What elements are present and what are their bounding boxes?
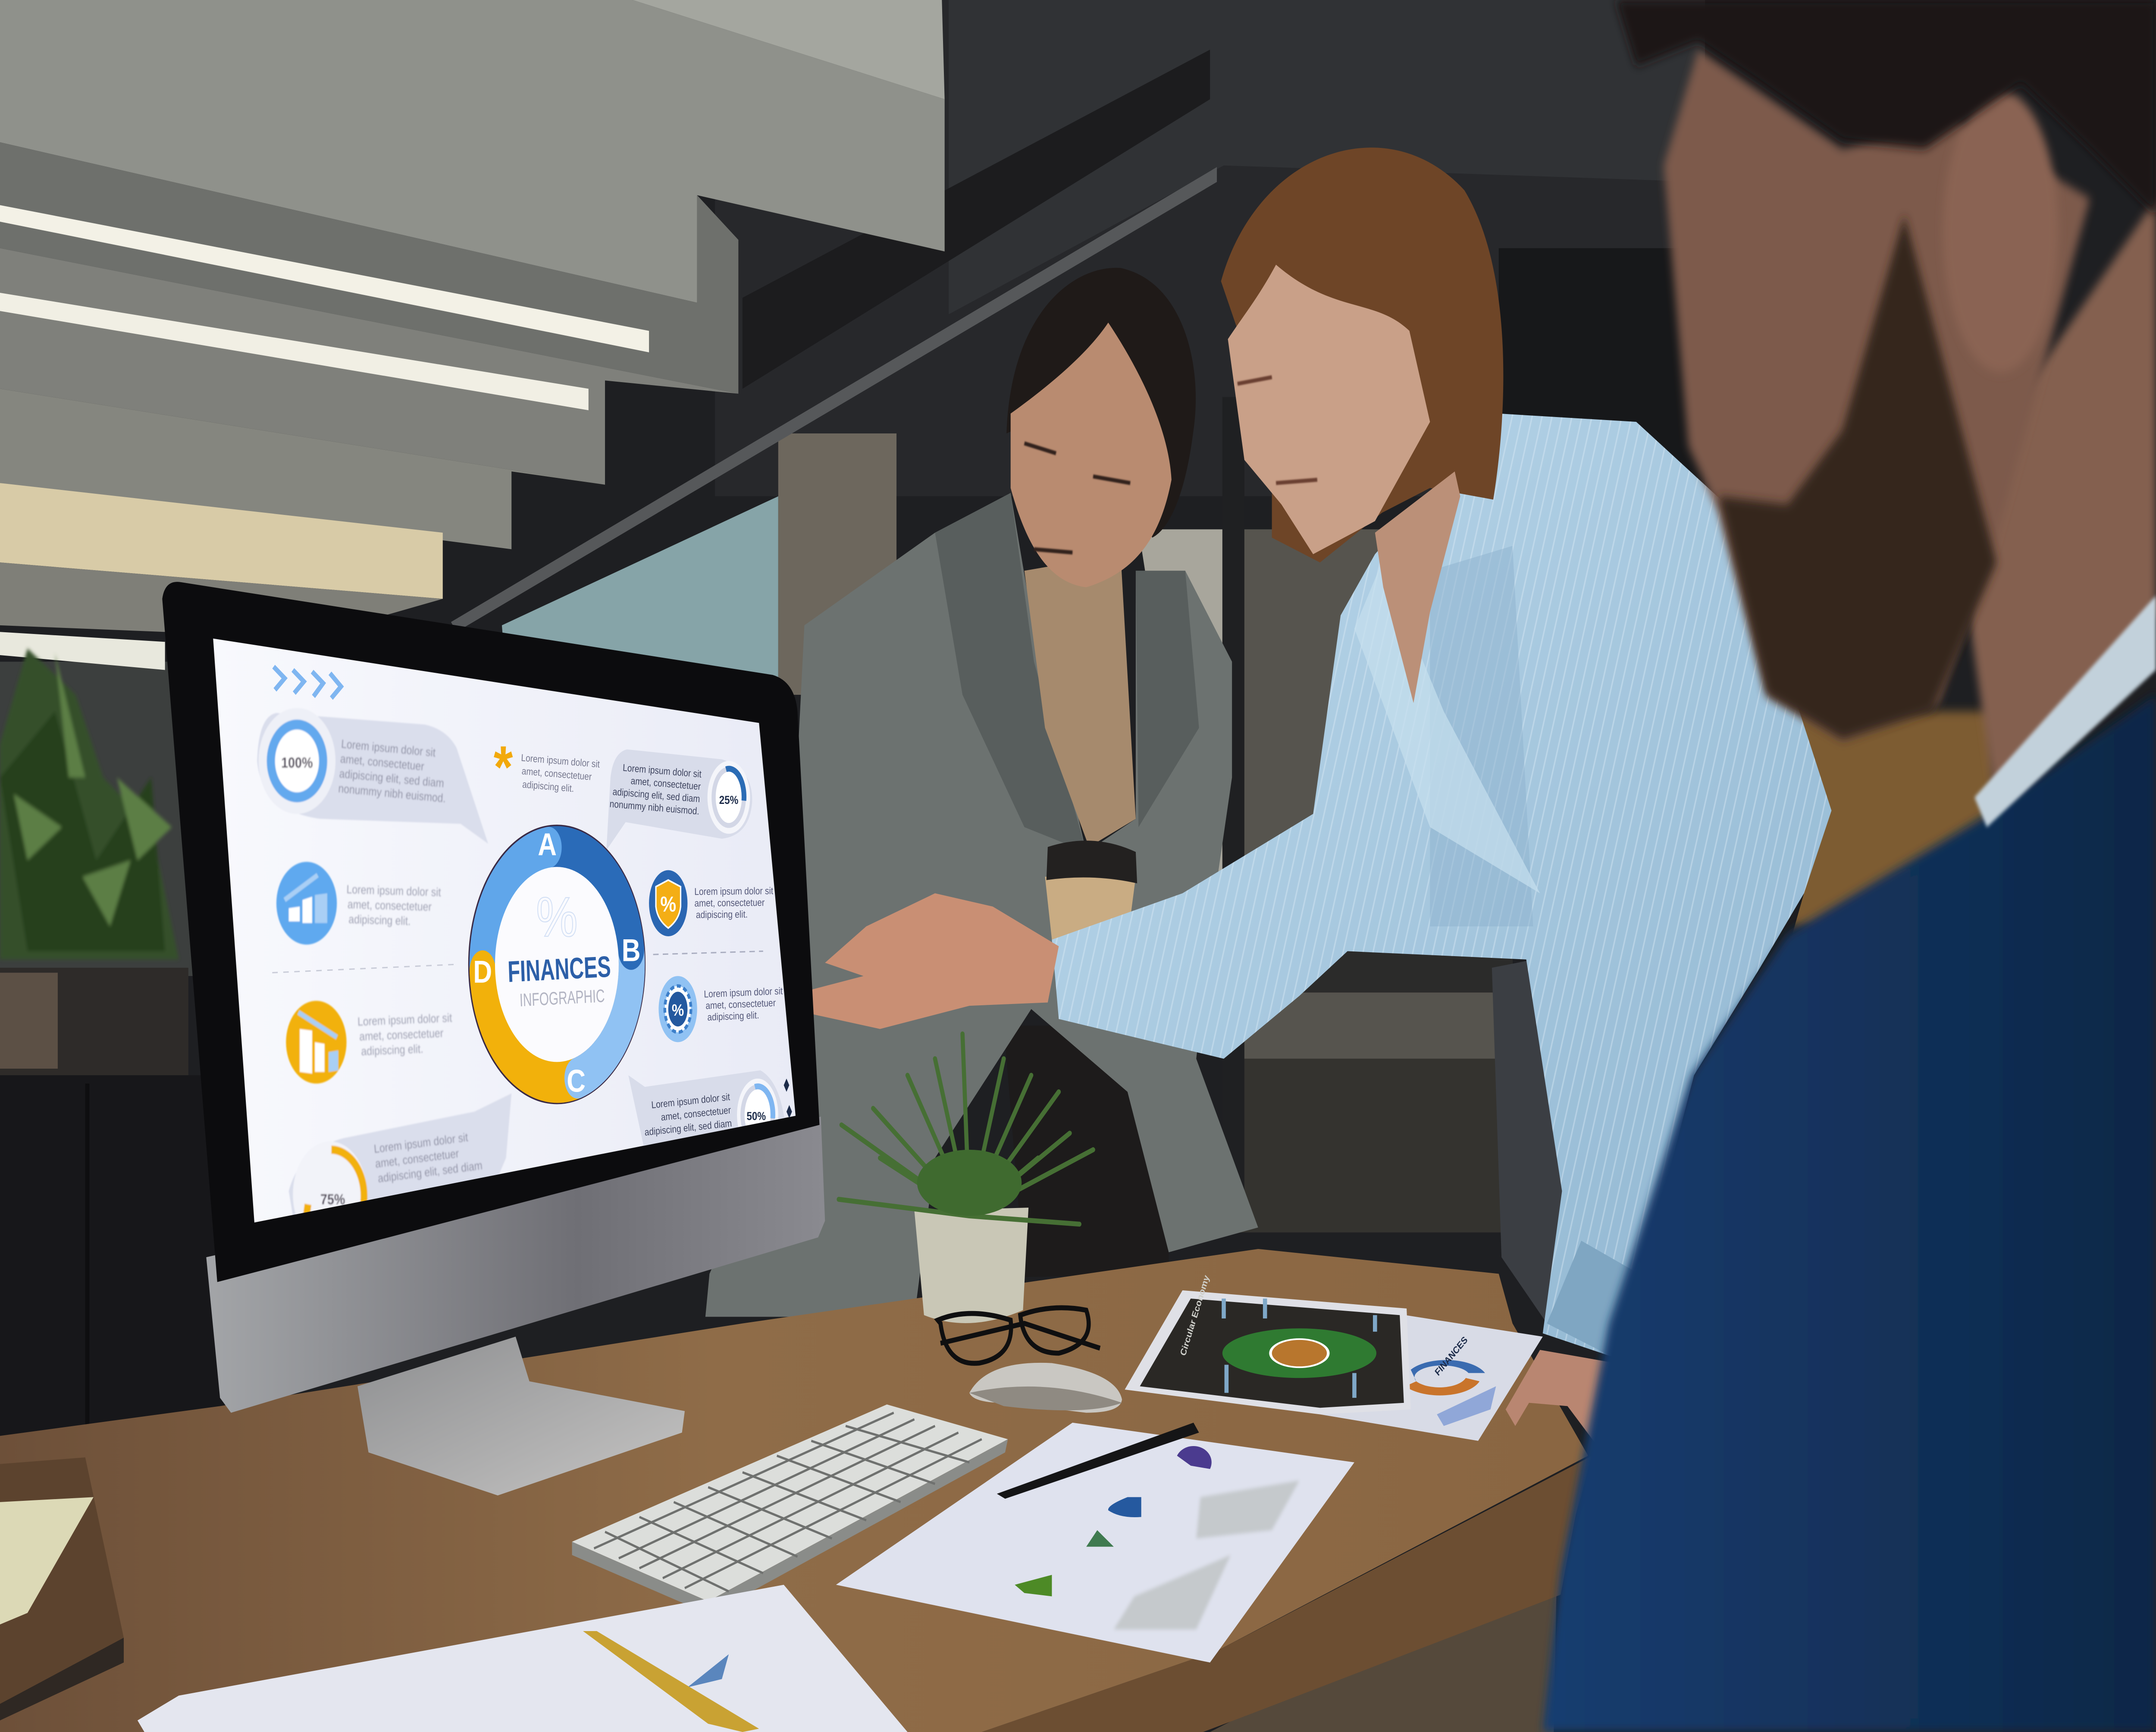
keyboard — [572, 1405, 1008, 1615]
paper: circular economy printout — [1125, 1274, 1411, 1415]
donut letters: B — [622, 933, 641, 968]
callout: 100%: 100% — [281, 754, 313, 771]
icon: falling bar chart: amet, consectetuer — [359, 1026, 444, 1043]
coffee cup — [1045, 841, 1137, 940]
icon: gear percent — [658, 976, 783, 1042]
callout: 75%: Lorem ipsum dolor sit — [373, 1131, 469, 1156]
presenting hand — [800, 893, 1059, 1029]
icon: rising bar chart: adipiscing elit. — [348, 913, 411, 928]
asterisk note — [494, 734, 600, 800]
glasses — [938, 1308, 1100, 1363]
callout: 25%: nonummy nibh euismod. — [609, 799, 699, 817]
icon: gear percent: amet, consectetuer — [705, 998, 776, 1011]
top — [1025, 554, 1136, 847]
icon: gear percent: adipiscing elit. — [707, 1010, 759, 1023]
shirt collar — [1974, 596, 2156, 827]
eyes and mouth — [1025, 443, 1130, 552]
blazer — [705, 493, 1258, 1317]
asterisk note: adipiscing elit. — [522, 779, 574, 794]
donut letters — [473, 827, 641, 1099]
dark trousers — [1004, 1026, 1169, 1277]
callout: 25% — [606, 750, 752, 850]
callout: 50% — [628, 1070, 787, 1158]
icon: rising bar chart: Lorem ipsum dolor sit — [346, 883, 441, 899]
donut letters: A — [538, 827, 557, 862]
icon: falling bar chart: adipiscing elit. — [361, 1042, 423, 1058]
donut letters: D — [473, 954, 492, 990]
paper: finances printout — [1320, 1315, 1543, 1441]
callout: 25%: 25% — [719, 794, 738, 807]
title — [507, 886, 611, 1010]
shirt stripes — [1052, 414, 1831, 1356]
neck — [1375, 471, 1460, 703]
callout: 75%: 75% — [320, 1191, 345, 1208]
leaves — [839, 1034, 1093, 1224]
icon: falling bar chart: Lorem ipsum dolor sit — [357, 1011, 452, 1029]
blazer lapels — [935, 493, 1199, 852]
shirt fold shadows — [1430, 546, 1533, 926]
donut letters: C — [567, 1064, 586, 1099]
monitor chin — [206, 1117, 825, 1413]
monitor bezel — [162, 582, 820, 1282]
hair — [1616, 0, 2156, 215]
face — [1228, 265, 1430, 554]
callout: 100%: Lorem ipsum dolor sit — [341, 737, 436, 759]
sparkles — [784, 1079, 792, 1118]
face — [1011, 323, 1172, 587]
desk top — [0, 1249, 1588, 1732]
title: FINANCES — [507, 951, 611, 988]
callout: 25%: amet, consectetuer — [630, 775, 701, 792]
pen — [997, 1423, 1199, 1499]
callout: 100% — [257, 708, 488, 844]
paper: finances printout: FINANCES — [1433, 1334, 1470, 1378]
monitor stand — [357, 1337, 685, 1495]
paper: bottom sheet — [138, 1585, 908, 1732]
suit — [1543, 695, 2156, 1732]
callout: 50%: 50% — [747, 1110, 766, 1123]
person: woman in grey blazer — [705, 268, 1258, 1317]
callout: 25%: Lorem ipsum dolor sit — [623, 762, 702, 780]
icon: shield percent — [649, 870, 774, 936]
ear — [1943, 91, 2059, 372]
callout: 75% — [289, 1093, 511, 1247]
callout: 50%: Lorem ipsum dolor sit — [651, 1092, 730, 1111]
callout: 75%: adipiscing elit, sed diam — [377, 1159, 483, 1185]
person: man in foreground — [1543, 0, 2156, 1732]
asterisk note: Lorem ipsum dolor sit — [521, 753, 600, 770]
second hand on desk — [1506, 1350, 1616, 1456]
donut chart — [470, 827, 644, 1098]
face — [1664, 50, 2090, 741]
beard — [1719, 215, 1996, 740]
pot — [915, 1208, 1028, 1323]
icon: shield percent: amet, consectetuer — [694, 897, 765, 909]
icon: gear percent: % — [672, 1001, 684, 1020]
hair back — [1221, 147, 1503, 562]
asterisk note: amet, consectetuer — [521, 766, 592, 782]
hair — [1006, 268, 1196, 538]
notebook — [0, 1457, 124, 1720]
callout: 75%: amet, consectetuer — [375, 1147, 460, 1170]
divider left — [272, 964, 455, 973]
callout: 25%: adipiscing elit, sed diam — [612, 787, 700, 805]
ceiling panels and lights — [0, 0, 1217, 670]
icon: gear percent: Lorem ipsum dolor sit — [704, 986, 783, 1000]
icon: falling bar chart — [286, 1001, 453, 1083]
desk — [0, 1249, 1592, 1732]
title: INFOGRAPHIC — [519, 986, 605, 1010]
face details — [1238, 377, 1317, 483]
callout: 50%: adipiscing elit, sed diam — [644, 1118, 732, 1138]
neck — [1952, 198, 2156, 794]
chevrons — [274, 667, 341, 698]
floor — [1210, 1591, 1557, 1732]
icon: shield percent: % — [660, 892, 676, 916]
icon: shield percent: Lorem ipsum dolor sit — [694, 886, 773, 897]
green ring — [1222, 1328, 1376, 1378]
mouse — [969, 1363, 1122, 1413]
monitor — [162, 582, 825, 1413]
icon: shield percent: adipiscing elit. — [696, 909, 748, 920]
divider right — [653, 951, 763, 954]
paper: circular economy printout: Circular Economy — [1178, 1274, 1211, 1357]
callout: 100%: adipiscing elit, sed diam — [339, 767, 445, 790]
paper: pie charts printout — [836, 1423, 1354, 1663]
callout: 50%: amet, consectetuer — [661, 1105, 731, 1123]
title: % — [536, 886, 578, 948]
desk side — [982, 1456, 1592, 1732]
callout: 100%: nonummy nibh euismod. — [338, 782, 446, 805]
cabinet and basket — [0, 968, 234, 1439]
shirt — [1052, 414, 1831, 1356]
trousers — [1492, 956, 1570, 1324]
pencil — [583, 1631, 759, 1732]
icon: rising bar chart — [276, 862, 441, 944]
icon: rising bar chart: amet, consectetuer — [348, 898, 432, 914]
asterisk note: * — [494, 734, 513, 800]
callout: 100%: amet, consectetuer — [340, 752, 425, 773]
screen — [213, 639, 796, 1223]
background plant — [0, 649, 179, 960]
potted plant — [839, 1034, 1093, 1323]
person: woman in blue shirt — [1052, 147, 1831, 1356]
